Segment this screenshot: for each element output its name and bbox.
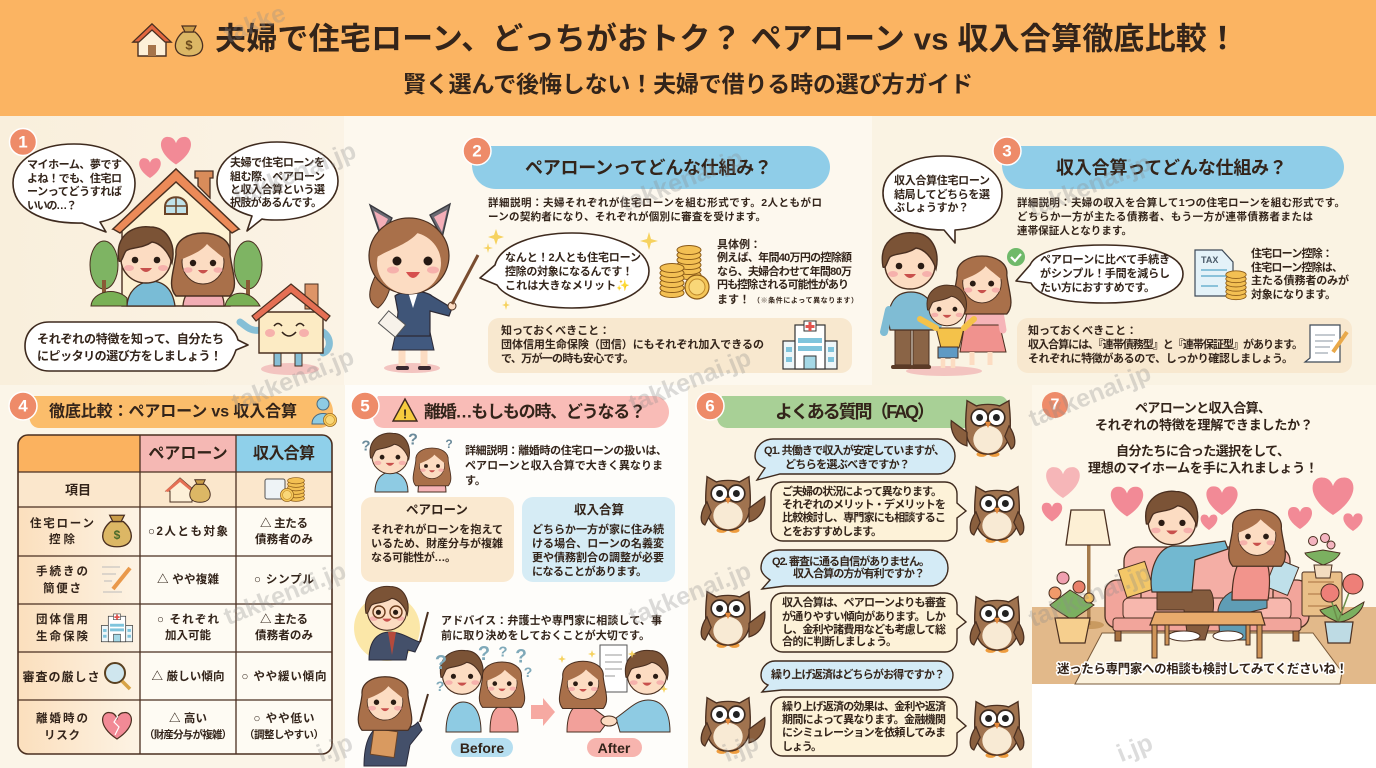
explanation text: す。 bbox=[465, 474, 486, 487]
icon: check bbox=[1007, 248, 1025, 266]
answer 1: ご夫婦の状況によって異なります。 bbox=[782, 484, 942, 498]
heading pill: ペアローンってどんな仕組み？ bbox=[525, 158, 772, 178]
label: before: Before bbox=[460, 740, 504, 756]
watermarks: takkenai.jp bbox=[625, 557, 755, 631]
speech bubble: right bbox=[217, 142, 338, 231]
illustration: house with couple bbox=[90, 137, 262, 306]
illustration: house mascot bbox=[240, 284, 330, 375]
illustration: worried couple: ? bbox=[361, 438, 371, 454]
deduction text: 対象になります。 bbox=[1251, 287, 1336, 301]
watermarks: i.jp bbox=[313, 728, 357, 768]
row: life insurance bbox=[36, 612, 314, 643]
row: deduction: △ 主たる bbox=[260, 516, 308, 530]
owl: right 3 bbox=[970, 702, 1024, 758]
row: item icons bbox=[65, 478, 304, 502]
answer 3 bbox=[771, 697, 966, 756]
example text: なら、夫婦合わせて年間80万 bbox=[717, 264, 852, 278]
owl: right 1 bbox=[970, 487, 1024, 543]
row: life insurance: 団体信用 bbox=[36, 612, 88, 626]
row: life insurance: 加入可能 bbox=[165, 628, 212, 642]
character: female advisor bbox=[358, 677, 428, 766]
row: divorce risk: ○ やや低い bbox=[254, 711, 314, 725]
icon: couple coins bbox=[312, 398, 337, 427]
heading pill bbox=[472, 146, 830, 189]
row: screening: ○ やや緩い傾向 bbox=[242, 669, 326, 683]
box: income combining bbox=[522, 497, 675, 582]
box: income combining: 収入合算 bbox=[574, 502, 624, 517]
explanation text bbox=[488, 196, 822, 223]
speech bubble: simple: がシンプル！手間を減らし bbox=[1040, 266, 1170, 280]
heading pill bbox=[29, 396, 337, 428]
owl: left 2 bbox=[701, 592, 765, 648]
badge 2: 2 bbox=[472, 142, 482, 160]
illustration: worried couple bbox=[361, 432, 453, 492]
heading pill bbox=[373, 396, 669, 428]
note box bbox=[488, 318, 852, 373]
icon: tax document bbox=[1195, 250, 1246, 300]
answer 2: し、金利や諸費用なども考慮して総 bbox=[782, 622, 946, 636]
question 1: どちらを選ぶべきですか？ bbox=[785, 457, 910, 471]
row: life insurance: 債務者のみ bbox=[255, 628, 314, 642]
box: pair loan: ペアローン bbox=[406, 503, 468, 517]
box: pair loan bbox=[361, 497, 514, 582]
explanation text: どちらか一方が主たる債務者、もう一方が連帯債務者または bbox=[1017, 210, 1314, 223]
watermarks: takkenai.jp bbox=[1025, 559, 1155, 633]
explanation text: ーンの契約者になり、それぞれが個別に審査を受けます。 bbox=[488, 210, 766, 223]
panel 1: intro bbox=[0, 116, 344, 385]
question 2: Q2. 審査に通る自信がありません。 bbox=[772, 554, 930, 568]
answer 3: しょう。 bbox=[782, 740, 822, 753]
answer 1 bbox=[771, 482, 966, 541]
closing message bbox=[1088, 400, 1318, 476]
row: deduction: 債務者のみ bbox=[255, 532, 314, 546]
panel 2: pair loan bbox=[344, 116, 872, 385]
comparison table bbox=[18, 435, 332, 754]
row: deduction: 住宅ローン bbox=[30, 516, 94, 530]
character: cat-ear woman bbox=[369, 204, 478, 373]
speech bubble: right: 組む際、ペアローン bbox=[230, 169, 325, 183]
row: life insurance: ○ それぞれ bbox=[157, 613, 220, 626]
example text: （※条件によって異なります） bbox=[753, 296, 858, 304]
speech bubble: right: 択肢があるんです。 bbox=[230, 195, 322, 209]
owl: right 2 bbox=[970, 597, 1024, 653]
title: 夫婦で住宅ローン、どっちがおトク？ ペアローン vs 収入合算徹底比較！ bbox=[215, 22, 1238, 56]
question 2: 収入合算の方が有利ですか？ bbox=[793, 566, 925, 580]
question 3: 繰り上げ返済はどちらがお得ですか？ bbox=[771, 667, 945, 681]
illustration: worried couple: ? bbox=[445, 437, 453, 451]
heading pill bbox=[717, 396, 1010, 428]
example text: 具体例： bbox=[717, 237, 761, 251]
row: divorce risk: △ 高い bbox=[169, 711, 207, 725]
note box: で、万が一の時も安心です。 bbox=[501, 351, 634, 365]
panel 7: closing bbox=[1032, 385, 1376, 768]
illustration: right flowers bbox=[1320, 574, 1364, 643]
header row: ペアローン bbox=[148, 446, 228, 462]
question 2 bbox=[761, 550, 948, 589]
illustration: before: ? bbox=[435, 652, 447, 674]
answer 2: 合的に判断しましょう。 bbox=[782, 634, 897, 648]
watermarks: takke bbox=[220, 0, 290, 49]
explanation text: 詳細説明：夫婦の収入を合算して1つの住宅ローンを組む形式です。 bbox=[1017, 196, 1345, 209]
character: family bbox=[882, 233, 1011, 376]
closing message: それぞれの特徴を理解できましたか？ bbox=[1095, 418, 1313, 432]
example text: ます！ bbox=[717, 293, 750, 306]
question 3 bbox=[761, 661, 953, 692]
illustration: rug bbox=[1075, 633, 1342, 684]
badge 5 bbox=[351, 392, 379, 420]
speech bubble: left: よね！でも、住宅ロ bbox=[27, 171, 122, 185]
illustration: before: ? bbox=[478, 643, 490, 665]
answer 1: 比較検討し、専門家にも相談するこ bbox=[782, 510, 946, 524]
row: procedure: △ やや複雑 bbox=[157, 572, 220, 586]
speech bubble: 収入合算住宅ローン bbox=[894, 173, 990, 187]
watermarks: takkenai.jp bbox=[228, 343, 358, 417]
explanation text bbox=[465, 443, 667, 487]
badge 5: 5 bbox=[360, 396, 370, 416]
row: screening: 審査の厳しさ bbox=[22, 669, 100, 684]
heading pill bbox=[1002, 146, 1344, 189]
row: deduction bbox=[30, 515, 314, 547]
badge 4 bbox=[9, 392, 37, 420]
box: income combining: どちらか一方が家に住み続 bbox=[532, 522, 664, 536]
panel 3: income combining bbox=[872, 116, 1376, 385]
illustration: worried couple: ? bbox=[408, 432, 418, 448]
closing message: 理想のマイホームを手に入れましょう！ bbox=[1088, 460, 1318, 476]
heading pill: 徹底比較：ペアローン vs 収入合算 bbox=[49, 402, 297, 420]
illustration: lamp bbox=[1066, 510, 1110, 629]
owl: left 3 bbox=[701, 698, 765, 754]
speech bubble: left bbox=[13, 144, 135, 232]
illustration: sofa and couple bbox=[1105, 491, 1309, 641]
box: income combining: になることがあります。 bbox=[532, 564, 647, 578]
illustration: before: ? bbox=[524, 664, 532, 680]
speech bubble: left: ーンってどうすれば bbox=[27, 184, 122, 198]
watermarks: takkenai.jp bbox=[1025, 359, 1155, 433]
badge 1: 1 bbox=[18, 132, 28, 152]
advice text bbox=[441, 613, 662, 642]
speech bubble: left: マイホーム、夢です bbox=[27, 157, 122, 171]
illustration: before: ? bbox=[498, 644, 508, 660]
note box bbox=[1017, 318, 1352, 373]
illustration: before: ? bbox=[436, 678, 444, 694]
illustration: left flowers bbox=[1049, 572, 1094, 643]
speech bubble: right: 夫婦で住宅ローンを bbox=[230, 155, 325, 169]
label: before bbox=[451, 738, 513, 757]
badge 3: 3 bbox=[1002, 142, 1012, 160]
explanation text: 連帯保証人となります。 bbox=[1017, 224, 1132, 237]
heading pill: 収入合算ってどんな仕組み？ bbox=[1056, 157, 1287, 178]
answer 3: にシミュレーションを依頼してみま bbox=[782, 725, 946, 739]
question 1: Q1. 共働きで収入が安定していますが、 bbox=[764, 443, 945, 457]
badge 7 bbox=[1042, 392, 1068, 418]
heading pill: 離婚…もしもの時、どうなる？ bbox=[424, 402, 646, 422]
answer 1: とをおすすめします。 bbox=[782, 525, 882, 538]
row: procedure: 簡便さ bbox=[43, 581, 81, 595]
row: divorce risk: （財産分与が複雑） bbox=[144, 728, 232, 741]
speech bubble: simple: ペアローンに比べて手続き bbox=[1040, 252, 1170, 266]
example text: 円も控除される可能性があり bbox=[717, 277, 849, 291]
arrow: before to after bbox=[531, 698, 555, 726]
deduction text: 住宅ローン控除は、 bbox=[1251, 260, 1343, 274]
box: pair loan: いるため、財産分与が複雑 bbox=[371, 536, 503, 550]
label: after bbox=[587, 738, 642, 757]
explanation text bbox=[1017, 196, 1345, 237]
row: divorce risk bbox=[36, 711, 324, 742]
badge 3 bbox=[993, 137, 1021, 165]
speech bubble: merit: なんと！2人とも住宅ローン bbox=[505, 250, 641, 264]
deduction text: 住宅ローン控除： bbox=[1251, 246, 1333, 260]
box: pair loan: なる可能性が…。 bbox=[371, 550, 456, 564]
icon: house and money bag: $ bbox=[185, 38, 193, 52]
illustration: cabinet and plant bbox=[1302, 534, 1342, 616]
badge 2 bbox=[463, 137, 491, 165]
hearts bbox=[1042, 467, 1363, 531]
icon: coins bbox=[660, 246, 709, 299]
row: screening: △ 厳しい傾向 bbox=[152, 669, 224, 683]
speech bubble: ぶしょうすか？ bbox=[894, 201, 969, 214]
illustration: table bbox=[1150, 612, 1265, 658]
speech bubble bbox=[883, 156, 1002, 243]
question 1 bbox=[755, 439, 955, 480]
row: deduction: 控除 bbox=[49, 532, 76, 546]
box: income combining: 更や債務割合の調整が必要 bbox=[532, 550, 664, 564]
watermarks: i.jp bbox=[719, 728, 763, 768]
note box: 収入合算には、『連帯債務型』と『連帯保証型』があります。 bbox=[1028, 337, 1303, 351]
speech bubble: simple: たい方におすすめです。 bbox=[1040, 280, 1155, 294]
answer 2: 収入合算は、ペアローンよりも審査 bbox=[782, 595, 946, 609]
icon: house and money bag bbox=[133, 24, 203, 56]
watermarks: takkenai.jp bbox=[1025, 149, 1155, 223]
answer 3: 繰り上げ返済の効果は、金利や返済 bbox=[782, 699, 946, 713]
deduction text: 主たる債務者のみが bbox=[1251, 273, 1349, 287]
answer 2: が通りやすい傾向があります。しか bbox=[782, 609, 946, 623]
explanation text: ペアローンと収入合算で大きく異なりま bbox=[465, 458, 663, 472]
badge 4: 4 bbox=[18, 396, 28, 416]
speech bubble: bottom: にピッタリの選び方をしましょう！ bbox=[37, 348, 222, 363]
deduction text bbox=[1251, 246, 1349, 301]
box: pair loan: それぞれがローンを抱えて bbox=[371, 522, 503, 536]
speech bubble: 結局してどちらを選 bbox=[894, 187, 990, 201]
subtitle: 賢く選んで後悔しない！夫婦で借りる時の選び方ガイド bbox=[403, 71, 973, 97]
speech bubble: merit: これは大きなメリット✨ bbox=[505, 278, 630, 292]
speech bubble: bottom bbox=[25, 322, 248, 371]
badge 7: 7 bbox=[1051, 396, 1060, 414]
owl: left 1 bbox=[701, 477, 765, 533]
sparkles bbox=[483, 229, 658, 310]
watermarks bbox=[220, 0, 1157, 768]
row: procedure bbox=[36, 564, 314, 595]
panel 5: divorce bbox=[345, 385, 688, 768]
header row: 収入合算 bbox=[253, 444, 315, 462]
row: deduction: $ bbox=[114, 528, 121, 542]
icon: hospital bbox=[783, 321, 837, 369]
closing note: 迷ったら専門家への相談も検討してみてくださいね！ bbox=[1057, 661, 1348, 676]
closing message: 自分たちに合った選択をして、 bbox=[1116, 444, 1290, 458]
panel 6: FAQ bbox=[688, 385, 1032, 768]
answer 1: それぞれのメリット・デメリットを bbox=[782, 497, 946, 511]
speech bubble: bottom: それぞれの特徴を知って、自分たち bbox=[37, 331, 224, 346]
badge 6: 6 bbox=[705, 396, 715, 416]
speech bubble: left: いいの…？ bbox=[27, 200, 77, 212]
heading pill: よくある質問（FAQ） bbox=[775, 402, 935, 422]
icon: tax document: TAX bbox=[1201, 255, 1218, 265]
row: divorce risk: 離婚時の bbox=[36, 711, 88, 725]
advice text: アドバイス：弁護士や専門家に相談して、事 bbox=[441, 613, 662, 627]
illustration: before bbox=[435, 643, 532, 732]
speech bubble: merit: 控除の対象になるんです！ bbox=[505, 264, 633, 278]
watermarks: i.jp bbox=[1113, 728, 1157, 768]
note box: 知っておくべきこと： bbox=[501, 323, 610, 337]
example text bbox=[717, 237, 858, 306]
explanation text: 詳細説明：夫婦それぞれが住宅ローンを組む形式です。2人ともがロ bbox=[488, 196, 822, 209]
watermarks: takkenai.jp bbox=[230, 137, 360, 211]
label: after: After bbox=[598, 740, 631, 756]
answer 3: 期間によって異なります。金融機関 bbox=[782, 712, 946, 726]
badge 1 bbox=[10, 128, 36, 156]
row: divorce risk: リスク bbox=[44, 729, 80, 742]
row: divorce risk: （調整しやすい） bbox=[244, 728, 324, 741]
row: item icons: 項目 bbox=[65, 482, 91, 498]
panel 4: comparison bbox=[0, 385, 345, 768]
watermarks: takkenai.jp bbox=[617, 144, 747, 218]
owl: top right bbox=[951, 401, 1015, 457]
row: procedure: 手続きの bbox=[36, 564, 88, 578]
speech bubble: right: と収入合算という選 bbox=[230, 182, 325, 196]
heading pill: ! bbox=[403, 406, 407, 422]
illustration: before: ? bbox=[515, 646, 527, 668]
row: life insurance: △ 主たる bbox=[260, 612, 308, 626]
example text: 例えば、年間40万円の控除額 bbox=[717, 250, 852, 264]
note box: 知っておくべきこと： bbox=[1028, 323, 1137, 337]
icon: contract bbox=[1305, 325, 1347, 362]
advice text: 前に取り決めをしておくことが大切です。 bbox=[441, 628, 650, 642]
note box: 団体信用生命保険（団信）にもそれぞれ加入できるの bbox=[501, 337, 764, 351]
note box: それぞれに特徴があるので、しっかり確認しましょう。 bbox=[1028, 351, 1293, 365]
illustration: after bbox=[558, 645, 670, 732]
header row bbox=[148, 444, 315, 462]
explanation text: 詳細説明：離婚時の住宅ローンの扱いは、 bbox=[465, 443, 667, 457]
panel: header bbox=[0, 0, 1376, 116]
speech bubble: merit bbox=[480, 233, 649, 308]
badge 6 bbox=[696, 392, 724, 420]
row: life insurance: 生命保険 bbox=[36, 629, 88, 643]
row: screening bbox=[22, 663, 326, 689]
speech bubble: simple bbox=[1016, 245, 1183, 303]
character: male advisor bbox=[354, 586, 428, 661]
box: income combining: ける場合、ローンの名義変 bbox=[532, 536, 664, 550]
closing message: ペアローンと収入合算、 bbox=[1135, 400, 1271, 416]
row: procedure: ○ シンプル bbox=[254, 573, 314, 586]
watermarks: takkenai.jp bbox=[625, 344, 755, 418]
watermarks: takkenai.jp bbox=[220, 557, 350, 631]
row: deduction: ○2人とも対象 bbox=[148, 524, 228, 538]
answer 2 bbox=[771, 593, 966, 652]
